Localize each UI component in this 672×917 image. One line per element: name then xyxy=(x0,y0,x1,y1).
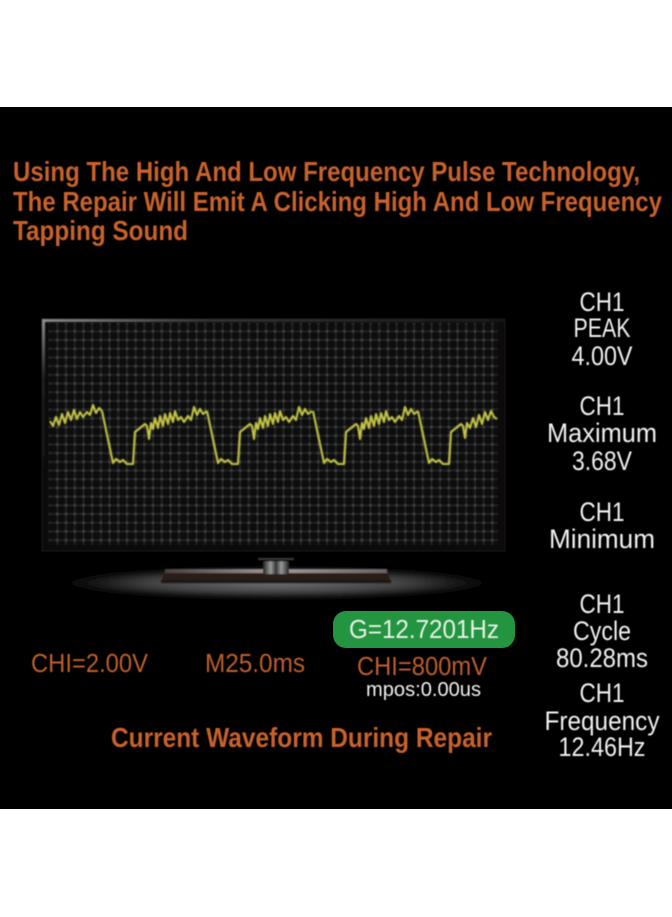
monitor highlight xyxy=(42,319,505,469)
scope readouts: CHI=2.00V xyxy=(31,650,148,678)
minimum: Minimum xyxy=(549,524,655,554)
floor glow xyxy=(62,568,492,598)
monitor bezel xyxy=(42,319,505,551)
peak: CH1 xyxy=(580,287,624,317)
scope readouts: M25.0ms xyxy=(205,650,305,678)
heading xyxy=(13,156,663,246)
heading: Tapping Sound xyxy=(13,215,188,246)
frequency: 12.46Hz xyxy=(558,732,646,762)
background panel xyxy=(0,107,672,809)
frequency: Frequency xyxy=(544,706,660,736)
cycle xyxy=(556,589,648,673)
minimum xyxy=(549,497,655,554)
television monitor xyxy=(42,319,505,598)
scope readouts: CHI=800mV xyxy=(357,653,487,681)
green frequency pill xyxy=(333,611,515,648)
frequency xyxy=(544,678,660,762)
peak: PEAK xyxy=(574,313,630,343)
stand base xyxy=(161,558,391,583)
waveform trace xyxy=(50,405,497,464)
channel measurements xyxy=(544,287,660,762)
peak: 4.00V xyxy=(572,341,632,371)
pill text: G=12.7201Hz xyxy=(349,614,499,644)
frequency: CH1 xyxy=(580,678,624,708)
minimum: CH1 xyxy=(580,497,624,527)
scope readouts xyxy=(31,650,487,681)
caption: Current Waveform During Repair xyxy=(111,722,492,753)
oscilloscope grid screen xyxy=(49,323,498,545)
cycle: CH1 xyxy=(580,589,624,619)
peak xyxy=(572,287,632,371)
stand neck xyxy=(263,561,289,574)
maximum xyxy=(547,391,657,476)
maximum: CH1 xyxy=(580,391,624,421)
maximum: Maximum xyxy=(547,418,657,448)
cycle: Cycle xyxy=(573,616,631,646)
cycle: 80.28ms xyxy=(556,643,648,673)
mpos readout: mpos:0.00us xyxy=(366,679,481,701)
maximum: 3.68V xyxy=(572,446,632,476)
